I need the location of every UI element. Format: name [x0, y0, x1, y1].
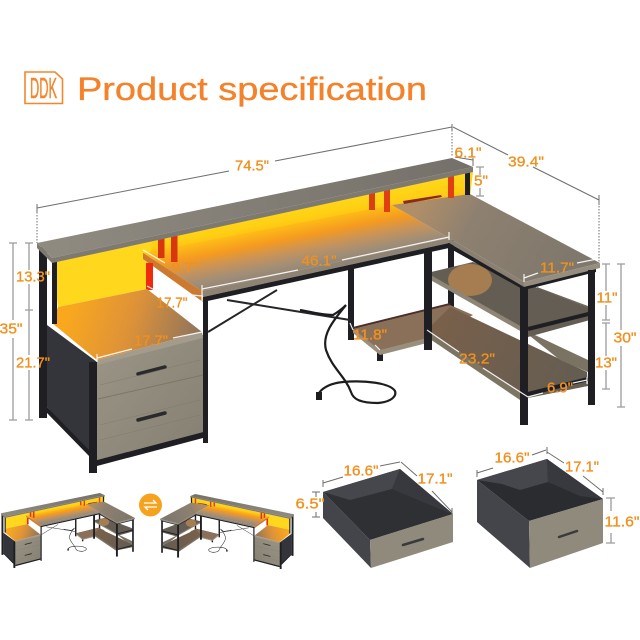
tall drawer dimensions: 17.1" [565, 458, 599, 476]
dimension labels on main desk: 5" [474, 172, 488, 190]
drawer outer side [323, 492, 371, 568]
dimension labels on main desk: 39.4" [508, 154, 544, 170]
dimension labels on main desk: 17.7" [156, 294, 188, 312]
desk front posts [203, 250, 595, 443]
drawer interior [323, 469, 453, 540]
left backlit panel [52, 241, 152, 307]
title: Product specification [77, 71, 427, 107]
small lower shelf [353, 304, 473, 355]
dimension labels on main desk: 17.7" [134, 332, 168, 350]
shallow drawer dimensions [296, 462, 452, 517]
upper drawer handle [138, 367, 165, 374]
drawer interior [477, 459, 603, 521]
dimension labels on main desk: 6.1" [454, 144, 482, 162]
tall drawer [477, 459, 603, 568]
dimension labels on main desk: 11.7" [540, 260, 574, 276]
dimension labels on main desk: 23.2" [459, 350, 495, 368]
shallow drawer dimensions: 17.1" [418, 470, 452, 488]
desktop: return wing [392, 194, 600, 290]
dimension labels on main desk: 6.9" [547, 380, 573, 396]
dimension labels on main desk: 30" [614, 330, 636, 346]
tall drawer dimensions: 11.6" [604, 514, 640, 530]
cabinet and hutch posts [39, 247, 203, 473]
logo [25, 72, 62, 105]
power strip [403, 195, 442, 204]
rear backlit panel [143, 172, 473, 256]
grey dimension lines [9, 124, 625, 420]
swap icon [139, 494, 162, 516]
lower drawer handle [138, 413, 165, 420]
dimension labels on main desk [0, 144, 636, 396]
mini desk: right-hand configuration [160, 494, 294, 569]
dimension labels on main desk: 9.7" [172, 260, 198, 276]
shallow drawer dimensions: 16.6" [344, 462, 378, 480]
dimension labels on main desk: 11" [596, 290, 618, 306]
drawer handle [403, 539, 423, 545]
drawer outer side [477, 480, 530, 568]
dimension labels on main desk: 13" [595, 354, 617, 372]
lower right shelf [427, 307, 589, 400]
X brace [208, 290, 350, 332]
mini desk: left-hand configuration [1, 493, 135, 568]
dimension labels on main desk: 46.1" [302, 252, 336, 270]
dimension labels on main desk: 74.5" [235, 158, 269, 174]
dimension labels on main desk: 11.8" [353, 326, 387, 344]
cabinet shelf top [52, 289, 202, 360]
hutch shelf [37, 158, 473, 263]
desktop: main run [143, 205, 449, 302]
cabinet fabric side [47, 325, 97, 462]
drawer wood front [370, 514, 453, 568]
drawer wood front [529, 499, 603, 568]
shallow drawer dimensions: 6.5" [296, 496, 324, 512]
shallow drawer [323, 469, 453, 568]
plug [316, 392, 322, 400]
upper right shelf [427, 262, 591, 337]
monitor riser legs [146, 172, 470, 290]
main L-shaped desk [37, 158, 600, 473]
power cable [300, 305, 395, 403]
tall drawer dimensions: 16.6" [494, 450, 530, 466]
logo: DDK [30, 73, 57, 105]
drawer handle [559, 531, 577, 537]
dimension labels on main desk: 35" [0, 320, 22, 338]
dimension labels on main desk: 13.3" [16, 268, 50, 286]
cabinet drawers [97, 332, 203, 460]
tall drawer dimensions [477, 447, 640, 543]
dimension labels on main desk: 21.7" [16, 354, 50, 372]
rear legs and lower frame [208, 240, 454, 361]
white inner dimension lines [97, 232, 597, 397]
